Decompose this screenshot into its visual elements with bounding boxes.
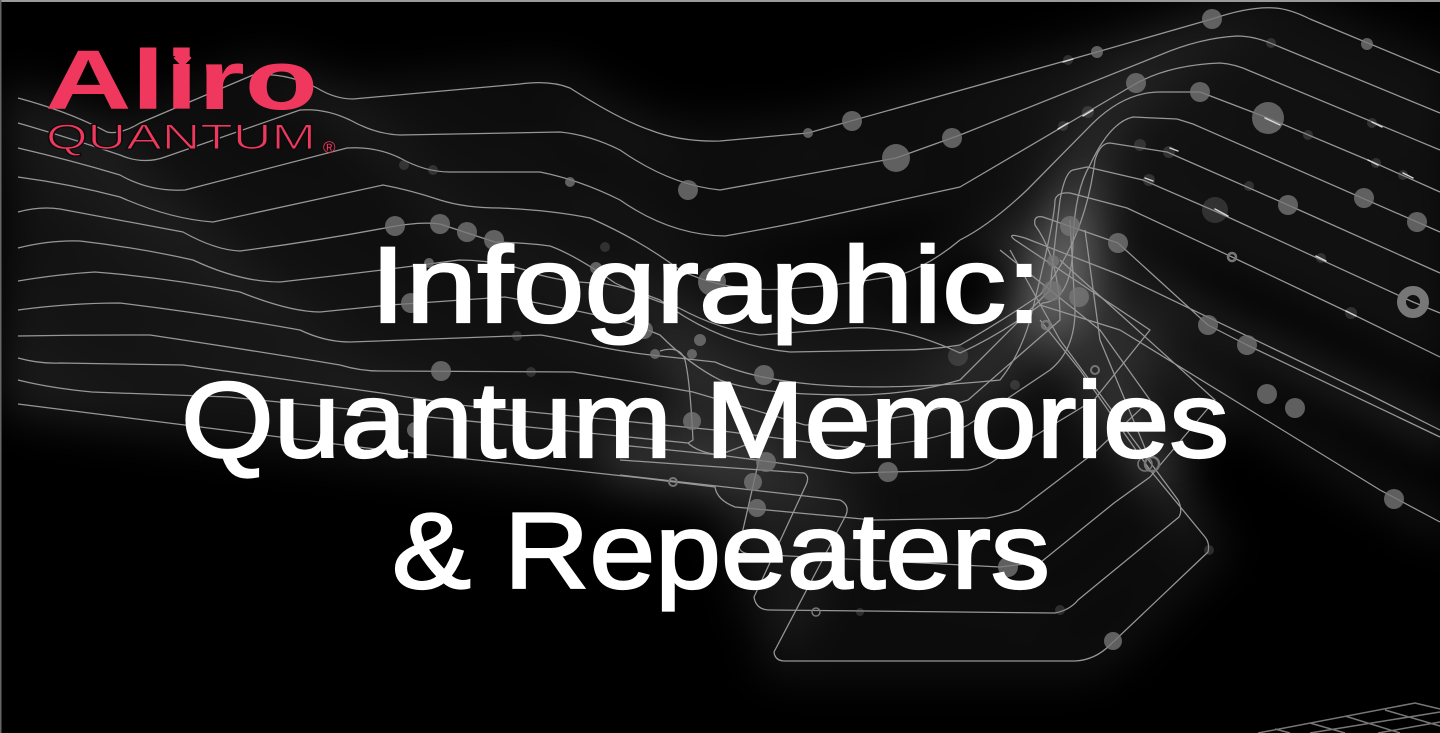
title bbox=[181, 224, 1229, 611]
perspective grid, bottom right bbox=[1258, 703, 1440, 733]
title line 3: & Repeaters bbox=[392, 490, 1050, 611]
faint dots bbox=[399, 38, 1408, 616]
edge lines bbox=[0, 0, 1440, 2]
logo diamond dot bbox=[174, 49, 192, 67]
ring nodes bbox=[669, 253, 1424, 616]
highlight streaks bbox=[1058, 59, 1413, 316]
node dots bbox=[385, 9, 1427, 650]
registered mark: ® bbox=[323, 138, 336, 157]
logo subtitle: QUANTUM bbox=[46, 118, 316, 157]
title line 2: Quantum Memories bbox=[181, 359, 1229, 480]
title line 1: Infographic: bbox=[370, 224, 1042, 345]
logo wordmark: Aliro bbox=[45, 33, 318, 127]
logo bbox=[45, 33, 336, 157]
bright glow near convergence bbox=[680, 177, 1205, 493]
